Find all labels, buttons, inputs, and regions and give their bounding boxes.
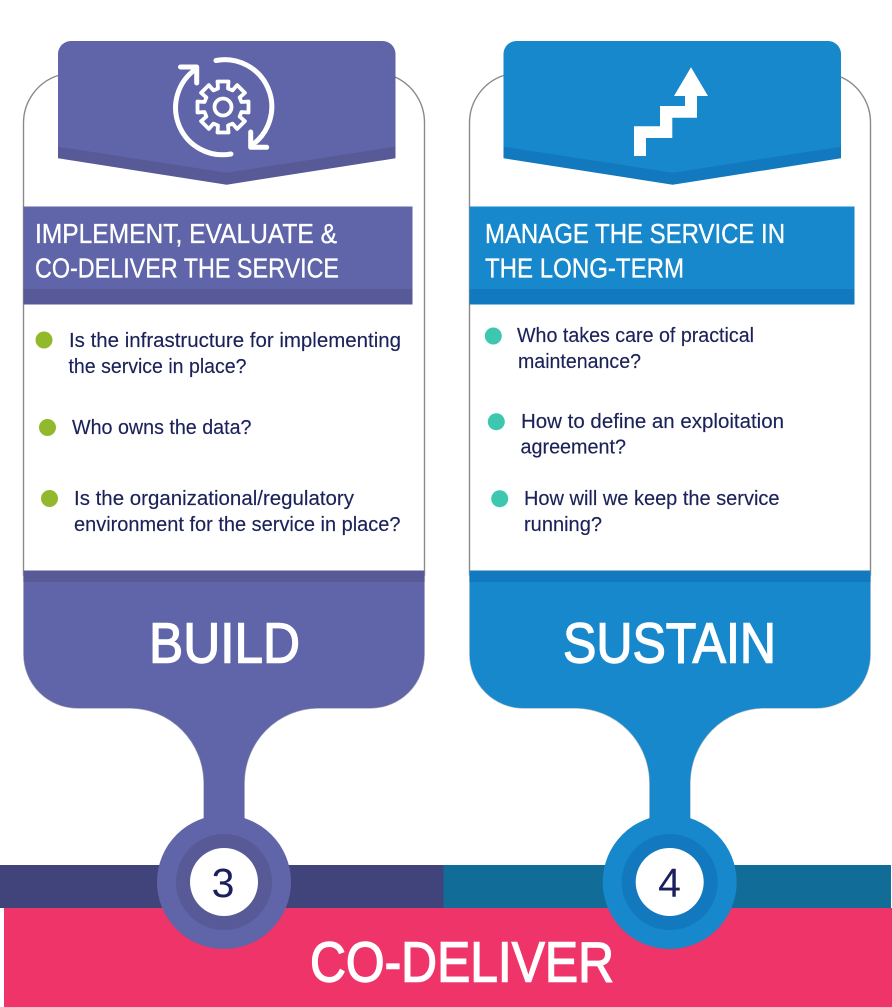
step marker 4: 4 (658, 860, 681, 906)
banner: chevron shadow (504, 146, 841, 185)
question: maintenance: Who takes care of practical (517, 324, 754, 347)
panel: build (23, 41, 425, 830)
label: build: BUILD (149, 612, 300, 676)
question: exploitation agreement (488, 410, 784, 458)
question: regulatory environment: environment for the service in place? (74, 513, 400, 536)
timeline bar: sustain (444, 865, 891, 908)
heading bar: CO-DELIVER THE SERVICE (35, 252, 339, 284)
step marker 3: 3 (212, 860, 234, 906)
step marker 4 (603, 815, 737, 949)
icon: stairs with up arrow (634, 67, 708, 156)
panel outline (469, 76, 871, 575)
footer shape with stem (469, 571, 871, 830)
question: infrastructure (36, 329, 401, 378)
banner (58, 41, 396, 173)
question: maintenance: maintenance? (518, 350, 641, 373)
heading bar: THE LONG-TERM (485, 252, 684, 284)
banner: co-deliver (4, 908, 892, 1007)
panel: sustain (469, 41, 871, 830)
timeline bar: build (0, 865, 444, 908)
question: regulatory environment (41, 487, 400, 536)
icon: gear with circular arrows (176, 60, 272, 155)
banner: chevron shadow (58, 146, 396, 185)
heading bar: IMPLEMENT, EVALUATE & (35, 218, 337, 249)
panel outline (24, 76, 425, 575)
step marker 3 (157, 815, 291, 949)
footer dark band (24, 570, 424, 582)
question: exploitation agreement: How to define an exploitation (521, 410, 784, 433)
question: keep running: How will we keep the service (524, 487, 780, 510)
heading bar (470, 206, 854, 304)
footer shape with stem (23, 571, 425, 830)
label: sustain: SUSTAIN (563, 612, 776, 676)
question: data ownership: Who owns the data? (72, 416, 252, 439)
heading bar: MANAGE THE SERVICE IN (485, 218, 785, 249)
footer dark band (470, 570, 870, 582)
heading bar (24, 206, 412, 304)
question: keep running: running? (524, 513, 602, 536)
question: infrastructure: the service in place? (68, 355, 246, 378)
question: infrastructure: Is the infrastructure for implementing (69, 329, 401, 352)
question: keep running (491, 487, 780, 536)
question: exploitation agreement: agreement? (520, 436, 626, 458)
question: regulatory environment: Is the organizational/regulatory (74, 487, 355, 510)
banner (504, 41, 841, 173)
banner: co-deliver: CO-DELIVER (310, 930, 614, 994)
question: maintenance (485, 324, 754, 373)
